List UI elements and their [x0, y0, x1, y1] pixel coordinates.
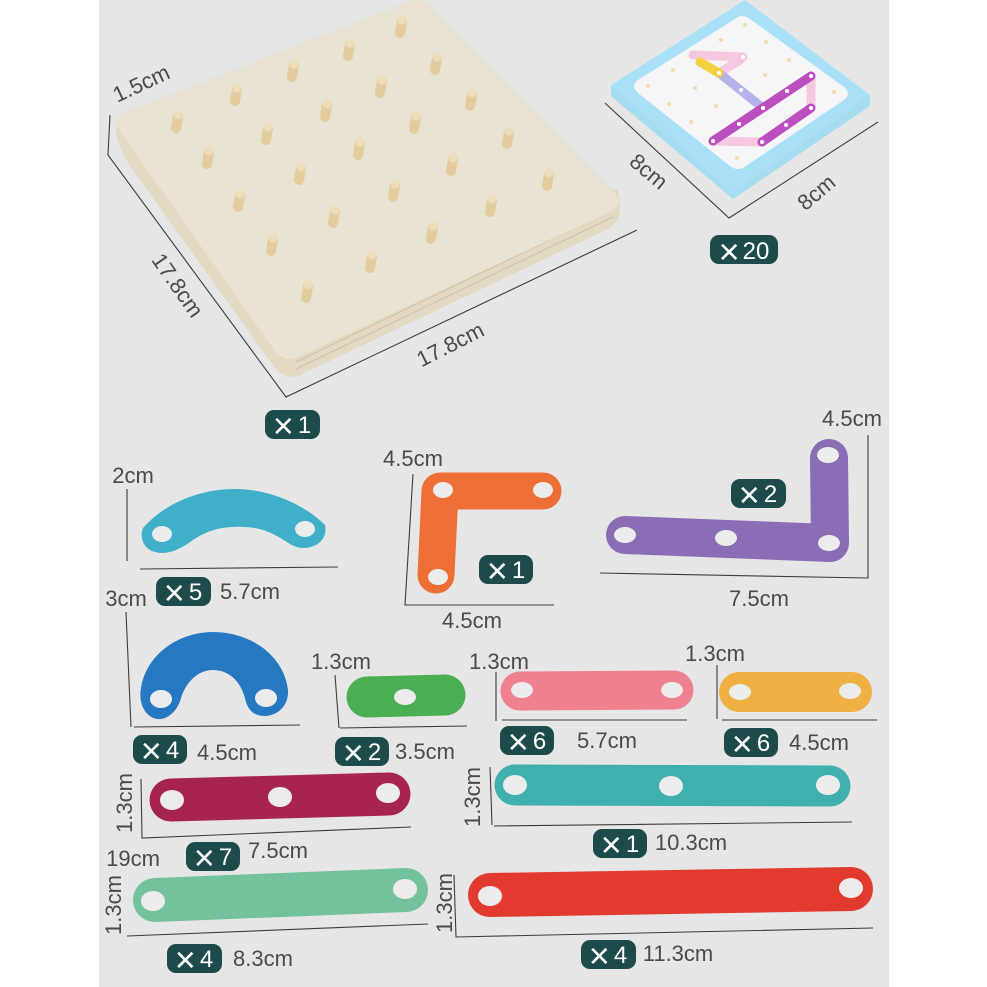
badge — [133, 730, 187, 771]
dimension lines: green — [335, 675, 467, 728]
label: 1.3cm — [101, 875, 126, 935]
badge: board quantity: × — [273, 405, 294, 446]
piece: purple L — [614, 447, 840, 551]
badge: 2 — [764, 481, 777, 508]
label: 5.7cm — [577, 728, 637, 753]
badge — [500, 721, 554, 762]
label: 10.3cm — [655, 830, 727, 855]
label: 4.5cm — [383, 446, 443, 471]
label: 1.3cm — [112, 773, 137, 833]
piece: green short bar — [367, 689, 445, 705]
badge: × — [487, 550, 508, 591]
badge: × — [194, 837, 215, 878]
piece: red bar — [478, 878, 863, 906]
label: 2cm — [112, 463, 154, 488]
label: 5.7cm — [220, 579, 280, 604]
dimension lines: orange L — [405, 474, 554, 605]
dots on card — [648, 25, 834, 158]
badge: board quantity: 1 — [298, 412, 311, 439]
label: 1.3cm — [469, 649, 529, 674]
badge — [593, 824, 647, 865]
badge: board quantity — [265, 405, 320, 446]
badge — [186, 837, 240, 878]
label: 4.5cm — [789, 730, 849, 755]
piece: maroon bar — [160, 783, 400, 810]
dimension lines: yellow — [717, 665, 877, 720]
badge: card quantity: 20 — [743, 238, 769, 265]
dimension lines: cards — [605, 103, 878, 218]
dimension lines: purple L — [600, 435, 868, 578]
badge — [167, 939, 222, 980]
badge: × — [343, 732, 364, 773]
badge: × — [508, 721, 529, 762]
pattern cards stack — [611, 0, 870, 199]
label: 1.3cm — [311, 649, 371, 674]
badge: 6 — [533, 728, 546, 755]
badge: card quantity: × — [719, 231, 740, 272]
badge: 6 — [757, 730, 770, 757]
wooden peg board — [116, 0, 620, 377]
label: 1.3cm — [432, 873, 457, 933]
peg tops — [178, 20, 549, 285]
piece: yellow bar — [729, 683, 861, 700]
dimension lines: board — [108, 115, 637, 397]
label: card depth: 8cm — [625, 148, 673, 194]
badge: 4 — [614, 942, 627, 969]
badge: 5 — [189, 579, 202, 606]
label: 1.3cm — [460, 767, 485, 827]
label: board thickness: 1.5cm — [109, 59, 174, 107]
label: 8.3cm — [233, 946, 293, 971]
dimension lines: maroon — [141, 779, 411, 838]
pegs — [176, 21, 549, 298]
label: 4.5cm — [442, 608, 502, 633]
badge: 7 — [219, 844, 232, 871]
badge — [479, 550, 533, 591]
badge: × — [175, 939, 196, 980]
label: board depth: 17.8cm — [147, 249, 209, 322]
badge: card quantity — [710, 231, 778, 272]
piece: orange L — [428, 482, 553, 585]
badge: 4 — [200, 946, 213, 973]
dimension lines: red — [454, 875, 873, 937]
piece: pink bar — [511, 682, 683, 698]
label: 3.5cm — [395, 739, 455, 764]
label: 4.5cm — [822, 406, 882, 431]
badge: 1 — [626, 831, 639, 858]
badge: 4 — [166, 737, 179, 764]
badge: 1 — [512, 557, 525, 584]
badge — [335, 732, 389, 773]
pattern lines on card — [693, 55, 811, 142]
badge: × — [589, 935, 610, 976]
badge — [156, 572, 211, 613]
badge: × — [164, 572, 185, 613]
label: 1.3cm — [685, 641, 745, 666]
label: board width: 17.8cm — [412, 317, 488, 372]
label: 4.5cm — [197, 740, 257, 765]
dimension lines: pink — [496, 672, 687, 721]
piece: light blue arc — [142, 489, 325, 553]
badge: 2 — [368, 739, 381, 766]
label: 7.5cm — [729, 586, 789, 611]
dimension line: mint — [127, 924, 428, 936]
label: 11.3cm — [643, 941, 713, 966]
label: card width: 8cm — [792, 169, 840, 215]
piece: teal bar — [503, 775, 840, 796]
badge: × — [601, 824, 622, 865]
badge: × — [141, 730, 162, 771]
piece: mint bar — [141, 879, 417, 911]
dimension lines: arch — [126, 612, 300, 727]
label: 19cm — [106, 846, 160, 871]
dimension lines: light blue arc — [127, 489, 338, 569]
label: 7.5cm — [248, 838, 308, 863]
badge — [581, 935, 636, 976]
piece: dark blue arch — [140, 632, 288, 719]
label: 3cm — [105, 586, 147, 611]
badge — [724, 723, 778, 764]
badge — [731, 474, 786, 515]
badge: × — [732, 723, 753, 764]
dimension lines: teal — [490, 767, 852, 826]
badge: × — [739, 474, 760, 515]
